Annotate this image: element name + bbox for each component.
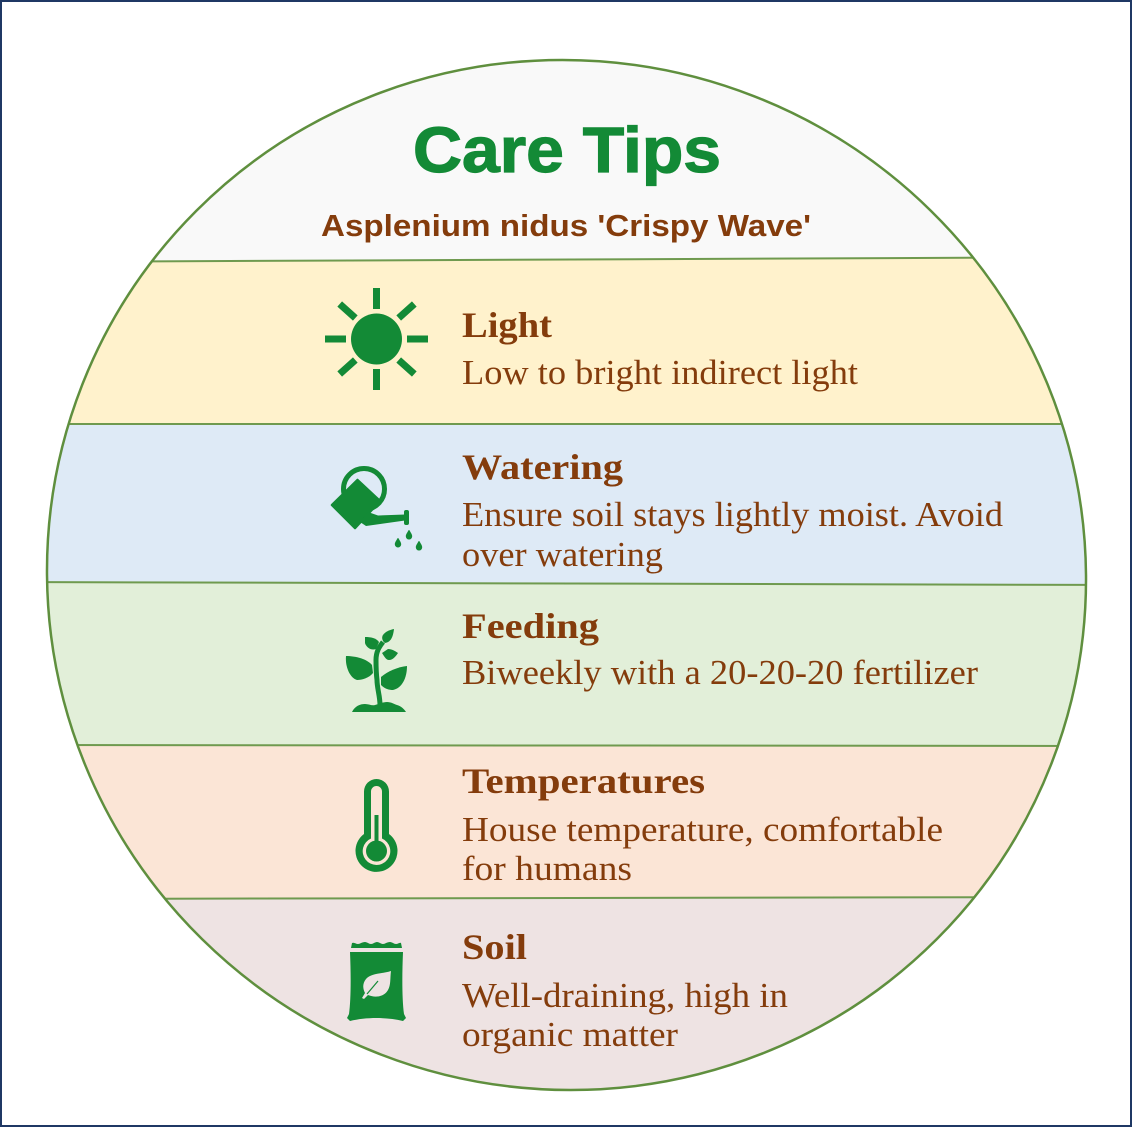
band: watering xyxy=(0,424,1132,585)
text: temperatures description: House temperature, comfortable xyxy=(462,810,943,849)
band: light xyxy=(70,258,1060,423)
heading: Temperatures: Temperatures xyxy=(462,761,705,801)
heading: Light: Light xyxy=(462,305,552,345)
band: feeding xyxy=(0,582,1132,746)
text: watering description: Ensure soil stays lightly moist. Avoid xyxy=(462,495,1004,534)
title: Care Tips xyxy=(413,114,721,186)
band: temperatures xyxy=(79,746,1056,898)
text: watering description: over watering xyxy=(462,535,663,574)
text: soil description: Well-draining, high in xyxy=(462,976,788,1015)
text: soil description: organic matter xyxy=(462,1015,678,1054)
text: soil description xyxy=(462,976,788,1054)
text: temperatures description xyxy=(462,810,943,888)
icon: soil bag xyxy=(347,942,406,1021)
heading: Soil: Soil xyxy=(462,927,527,967)
icon: sun xyxy=(325,288,428,390)
subtitle: Asplenium nidus 'Crispy Wave' xyxy=(321,208,811,243)
text: light description: Low to bright indirect light xyxy=(462,353,858,392)
band: title xyxy=(0,0,1132,262)
text: temperatures description: for humans xyxy=(462,849,632,888)
text: feeding description: Biweekly with a 20-20-20 fertilizer xyxy=(462,653,978,692)
text: watering description xyxy=(462,495,1004,574)
icon: thermometer xyxy=(356,779,397,872)
heading: Feeding: Feeding xyxy=(462,606,599,646)
icon: plant xyxy=(346,629,407,712)
band: soil xyxy=(168,898,972,1089)
icon: watering can xyxy=(332,468,422,550)
heading: Watering: Watering xyxy=(462,447,623,487)
